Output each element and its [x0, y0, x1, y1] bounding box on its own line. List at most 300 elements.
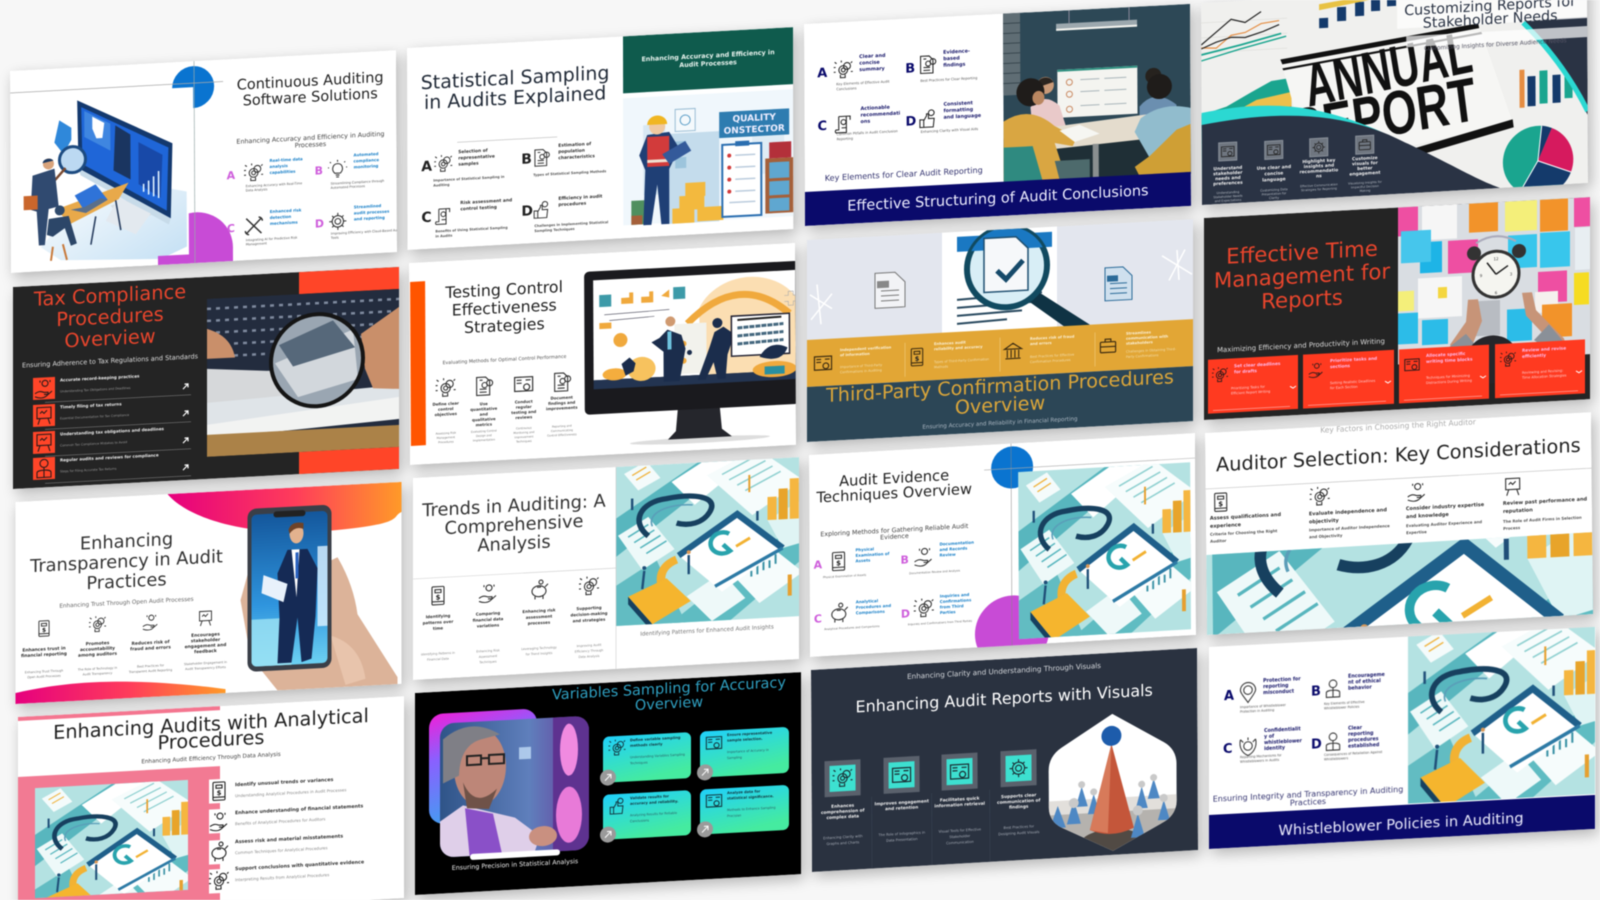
item A: representative — [458, 153, 495, 161]
item 1: Confirmations in Auditing — [840, 368, 882, 374]
photo: sticky notes and clock: 9 — [1480, 273, 1483, 278]
subtitle: Ensuring Adherence to Tax Regulations and Standards — [22, 352, 199, 370]
column 4: Supporting — [576, 605, 602, 611]
subtitle: Evaluating Methods for Optimal Control Performance — [443, 354, 567, 366]
column 3: Monitoring and — [513, 430, 535, 435]
title: Overview — [64, 325, 156, 352]
item D: Streamlined — [354, 203, 381, 209]
column 1: Financial Data — [427, 657, 449, 662]
item A — [1224, 676, 1301, 715]
photo: hand holding phone — [240, 501, 398, 692]
column 4: decision-making — [571, 610, 608, 617]
column 4: feedback — [194, 648, 217, 655]
item B — [521, 140, 606, 178]
card 2: sample selection. — [727, 737, 763, 743]
slide: Whistleblower Policies in Auditing — [1209, 615, 1600, 849]
item C: in Audits — [435, 234, 452, 238]
row 2 — [33, 397, 191, 430]
column 1: Enhancing Trust Through — [25, 669, 63, 675]
column 3 — [1299, 137, 1338, 192]
item A: Physical — [855, 546, 875, 552]
column 2: Use — [480, 401, 488, 406]
slide: Enhancing Audit Reports with Visuals — [811, 648, 1198, 874]
item B: population — [558, 148, 585, 155]
column 3: assessment — [526, 613, 552, 620]
column 3 — [934, 752, 986, 846]
column 4: Supports clear — [1001, 792, 1037, 800]
column 4: better — [1357, 165, 1373, 172]
row 2: Benefits of Analytical Procedures for Auditors — [235, 816, 326, 826]
item B: Documentation Review and Analysis — [909, 568, 961, 575]
column 1: Identifying Patterns in — [421, 651, 455, 657]
column 4: Audit Transparency Efforts — [185, 665, 226, 671]
column 2 — [473, 584, 504, 665]
card 4: Review and revise — [1522, 345, 1566, 354]
column 2: quantitative — [470, 406, 498, 412]
slide: Enhancing Transparency in Audit Practices — [16, 482, 402, 704]
column 2: Evaluate independence and — [1309, 507, 1387, 517]
item C: whistleblower — [1264, 738, 1303, 746]
title: Enhancing — [80, 529, 173, 555]
column 4: engagement and — [185, 642, 226, 650]
column 2: Design and — [476, 433, 492, 438]
item A: Protection for — [1263, 676, 1301, 684]
item C: Reporting — [837, 136, 853, 141]
card 3: Validate results for — [630, 794, 669, 800]
green banner: Enhancing Accuracy and Efficiency in — [641, 48, 775, 63]
illustration: auditors inspecting monitor — [23, 94, 187, 266]
bar chart top — [1319, 0, 1396, 28]
slide: Statistical Sampling in Audits Explained — [407, 27, 793, 250]
item 3: Confirmation Procedures — [1030, 358, 1071, 364]
column 3: ns — [1316, 174, 1322, 179]
item B: Evidence- — [943, 48, 970, 56]
item A: A — [817, 66, 827, 81]
item C: control testing — [460, 204, 497, 212]
isometric illustration — [1403, 615, 1600, 818]
item B: Types of Statistical Sampling Methods — [533, 169, 606, 177]
card 1: Techniques — [629, 760, 648, 765]
item D: D — [905, 114, 917, 130]
column 1: preferences — [1213, 180, 1243, 187]
column 2: Techniques — [478, 659, 497, 664]
column 3 — [511, 376, 537, 444]
item B: Automated — [354, 151, 379, 157]
illustration: quality inspector — [623, 89, 793, 226]
column 3: fraud and errors — [130, 644, 171, 653]
column 2 — [1309, 483, 1390, 539]
item B: compliance — [354, 157, 379, 163]
column 3: for Trend Insights — [526, 651, 553, 656]
item C: C — [227, 222, 235, 235]
column 3: Effective Communication — [1300, 182, 1338, 188]
column 3: processes — [528, 620, 551, 626]
row 4: Steps for Filing Accurate Tax Returns — [60, 467, 117, 474]
column 1: Assess qualifications and — [1210, 512, 1281, 522]
card 4: Reviewing and Revising: — [1522, 369, 1563, 375]
column 4: Process — [1503, 525, 1521, 531]
column 4: Best Practices for — [1004, 824, 1035, 830]
column 4: Efficiency Through — [575, 648, 603, 654]
item C: Procedures and — [856, 603, 891, 610]
item D: audit processes — [354, 209, 390, 215]
item C: Benefits of Using Statistical Sampling — [435, 226, 508, 233]
slide: Customizing Reports for Stakeholder Needs — [1201, 0, 1588, 215]
item D: and language — [943, 113, 982, 121]
column 3: recommendatio — [1300, 167, 1338, 175]
isometric illustration — [1013, 457, 1201, 651]
item A: Protection in Auditing — [1240, 708, 1274, 714]
photo: sticky notes and clock — [1398, 197, 1590, 389]
column 4: Customize — [1352, 155, 1378, 162]
column 2: and Objectivity — [1309, 533, 1343, 539]
card 1: Define variable sampling — [630, 736, 681, 742]
card 3: accuracy and reliability. — [630, 799, 678, 806]
item A: Enhancing Accuracy with Real-Time — [246, 181, 302, 188]
column 4: Stakeholder Engagement in — [184, 660, 227, 666]
column 3: Transparent Audit Reporting — [128, 668, 172, 674]
item A: analysis — [270, 163, 289, 169]
column 4: stakeholder — [191, 637, 221, 644]
row 3: Common Techniques for Analytical Procedures — [235, 845, 328, 855]
card 3: Distractions During Writing — [1426, 379, 1472, 385]
column 3: Techniques — [515, 439, 532, 444]
item A — [421, 147, 505, 188]
item 2: Methods — [934, 365, 948, 369]
item B: Estimation of — [558, 141, 591, 149]
column 1: financial reporting — [21, 651, 67, 659]
title: Tax Compliance — [33, 280, 186, 311]
slide: Third-Party Confirmation Procedures Overview — [807, 214, 1193, 442]
item C: Risk assessment and — [460, 197, 512, 206]
card 2: Ensure representative — [727, 731, 773, 737]
item C: Analytical — [856, 598, 879, 604]
slide: Effective Time Management for Reports — [1204, 197, 1590, 420]
item B: based — [943, 55, 960, 62]
column 4: Encourages — [191, 631, 220, 639]
card 2: Setting Realistic Deadlines — [1330, 379, 1375, 385]
caption: Ensuring Integrity and Transparency in Auditing — [1213, 785, 1403, 804]
row 3: Assess risk and material misstatements — [235, 833, 343, 845]
column 3: Evaluating Auditor Experience and — [1406, 519, 1482, 528]
column 3: Best Practices for — [137, 663, 165, 669]
row 2: Timely filing of tax returns — [60, 401, 122, 410]
column 4: Improving Audit — [577, 643, 602, 648]
item 4 — [1100, 329, 1177, 360]
subtitle: Enhancing Audit Efficiency Through Data Analysis — [141, 752, 281, 765]
item D: Sampling Techniques — [534, 227, 575, 233]
card 2 — [697, 727, 789, 781]
column 1: Criteria for Choosing the Right — [1210, 528, 1278, 537]
column 2: variations — [477, 622, 500, 629]
card 2: Prioritize tasks and — [1330, 356, 1377, 364]
row 2 — [209, 801, 363, 834]
item 3: and errors — [1030, 341, 1053, 346]
column 3: Reduces risk of — [132, 639, 170, 647]
card 2: Sampling — [727, 755, 742, 760]
title: Techniques Overview — [815, 481, 972, 507]
item D — [901, 592, 973, 627]
isometric illustration (zoomed) — [1200, 397, 1600, 807]
column 4: Data Analysis — [578, 654, 600, 659]
item C: Analytical Procedures and Comparisons — [824, 624, 880, 631]
item B: monitoring — [354, 163, 379, 169]
column 4: Making — [1360, 188, 1370, 193]
item C: Integrating AI for Predictive Risk — [246, 236, 298, 242]
slide: Variables Sampling for Accuracy Overview — [415, 672, 801, 895]
item 4: stakeholders — [1126, 340, 1154, 346]
column 1: Enhances — [831, 803, 855, 810]
column 3: Visual Tools for Effective — [939, 827, 981, 834]
item A — [817, 53, 890, 92]
item B: characteristics — [558, 153, 595, 161]
item D: Inquiries and — [940, 592, 970, 599]
kicker: Key Factors in Choosing the Right Auditor — [1320, 417, 1477, 435]
item C: C — [814, 612, 822, 626]
title: Trends in Auditing: A — [421, 491, 607, 522]
row 3: Common Tax Compliance Mistakes to Avoid — [60, 440, 127, 448]
slide: Auditor Selection: Key Considerations — [1200, 397, 1600, 807]
card 1: Set clear deadlines — [1234, 361, 1281, 369]
slide: Tax Compliance Procedures Overview — [13, 267, 399, 489]
column 1: Understanding — [1217, 190, 1239, 195]
column 3: Enhancing risk — [522, 607, 556, 614]
column 1: Define clear — [433, 400, 459, 407]
card 4 — [697, 785, 789, 838]
row 1: Identify unusual trends or variances — [235, 777, 333, 788]
item A: Key Elements of Effective Audit — [836, 80, 890, 86]
annual report block — [1280, 24, 1514, 154]
caption: Practices — [1290, 797, 1326, 808]
footer banner — [1209, 795, 1595, 849]
row 3 — [33, 424, 191, 457]
item D: Clear — [1348, 725, 1363, 732]
item B: B — [521, 151, 532, 168]
slide: Continuous Auditing Software Solutions — [10, 50, 402, 273]
column 2: Implementation — [473, 437, 495, 443]
item A: Physical Examination of Assets — [823, 573, 867, 579]
item C — [817, 104, 901, 142]
annual report block: REPORT — [1287, 65, 1480, 167]
column 4 — [546, 372, 578, 438]
row 3 — [209, 833, 343, 865]
item D — [521, 193, 608, 234]
card 1 — [1208, 355, 1298, 414]
item C: Confidentialit — [1264, 726, 1301, 734]
item A: samples — [458, 161, 479, 168]
column 2: financial data — [473, 616, 504, 623]
item D — [905, 100, 982, 135]
item A: summary — [859, 66, 886, 73]
title: in Audits Explained — [424, 82, 606, 114]
item D — [315, 204, 398, 240]
card 3 — [600, 790, 691, 843]
column 3: Continuous — [516, 426, 532, 430]
item A: Auditing — [433, 183, 450, 188]
item 3: Reduces risk of fraud — [1030, 335, 1075, 341]
column 1: Assessing Risk — [436, 431, 456, 436]
item B — [314, 151, 384, 191]
item C: recommendati — [860, 111, 901, 119]
title: Practices — [86, 569, 167, 594]
title: Effectiveness — [452, 295, 557, 320]
item C: y of — [1264, 734, 1275, 740]
item B — [905, 48, 977, 84]
column 3: information retrieval — [934, 801, 986, 810]
column 1: objectives — [435, 411, 458, 417]
item D: procedures — [1348, 736, 1379, 744]
column 1: complex data — [826, 813, 859, 821]
pie chart — [1502, 125, 1574, 188]
title: Enhancing Audit Reports with Visuals — [855, 681, 1153, 716]
dark curved panels — [1201, 17, 1588, 205]
card 3 — [1399, 345, 1489, 403]
item B: Best Practices for Clear Reporting — [920, 76, 977, 83]
title: Effective Time — [1226, 237, 1378, 270]
column 2: Assessment — [479, 654, 498, 659]
card 3: Allocate specific — [1426, 351, 1466, 359]
title: Procedures — [158, 726, 264, 754]
item A: Conclusions — [836, 86, 857, 91]
column 1 — [821, 759, 865, 846]
title: Transparency in Audit — [29, 546, 223, 577]
row 4 — [33, 450, 191, 484]
item D: procedures — [558, 201, 587, 208]
area chart — [1201, 78, 1292, 128]
card 3: writing time blocks — [1426, 356, 1473, 365]
title: Auditor Selection: Key Considerations — [1216, 434, 1581, 476]
item D: Whistleblowers — [1324, 756, 1349, 762]
item 2: Types of Third-Party Confirmation — [933, 357, 989, 364]
photo: meeting room — [1003, 4, 1191, 184]
column 1: Auditor — [1210, 538, 1227, 544]
column 1: Identifying — [426, 613, 450, 619]
column 2 — [874, 755, 929, 843]
isometric illustration — [611, 446, 808, 634]
title box: Stakeholder Needs — [1423, 8, 1558, 32]
column 2: Clarity — [1269, 196, 1279, 200]
item A: Data Analysis — [246, 187, 268, 193]
card 2 — [1303, 350, 1394, 409]
title: Third-Party Confirmation Procedures — [825, 365, 1174, 407]
column 4: Control Effectiveness — [547, 432, 577, 438]
column 1 — [1213, 142, 1244, 203]
column 2: Promotes — [86, 640, 110, 647]
row 3: Understanding tax obligations and deadlines — [60, 426, 164, 437]
item A: A — [421, 159, 432, 175]
item 4: Streamlines — [1126, 330, 1152, 336]
card 4 — [1495, 339, 1585, 398]
item B: Documentation — [939, 540, 974, 547]
card 4: Time Allocation Strategies — [1521, 373, 1567, 380]
subtitle: Maximizing Efficiency and Productivity in Writing — [1217, 337, 1385, 354]
green banner: Audit Processes — [679, 58, 737, 69]
column 4: Reporting and — [552, 424, 572, 429]
item A: capabilities — [270, 169, 296, 175]
item D: D — [1311, 737, 1322, 753]
item C: detection — [270, 214, 291, 220]
column 2: Use clear and — [1257, 164, 1291, 172]
item A: Importance of Whistleblower — [1240, 703, 1287, 709]
title: Comprehensive — [445, 511, 583, 539]
item B: Encourageme — [1348, 672, 1386, 680]
item C: C — [817, 119, 827, 134]
column 1: time — [433, 625, 443, 631]
item A: Importance of Statistical Sampling in — [433, 175, 505, 183]
column 3 — [128, 614, 172, 674]
column 2 — [77, 615, 117, 677]
column 4: Visualizing Insights for — [1348, 180, 1383, 186]
column 3: Stakeholder — [949, 834, 971, 839]
title box — [1397, 0, 1587, 48]
column 3: Expertise — [1406, 529, 1427, 535]
column 2: and — [480, 411, 488, 417]
item B: B — [1311, 684, 1321, 700]
item B: B — [901, 553, 909, 567]
column 2: Presentation for — [1262, 191, 1287, 197]
column 3: Communication — [946, 840, 974, 845]
column 2: concise — [1264, 170, 1283, 177]
row 4: Regular audits and reviews for compliance — [60, 452, 159, 463]
column 1: Enhances trust in — [22, 645, 66, 654]
column 2: and retention — [885, 804, 918, 812]
item D: formatting — [943, 107, 974, 114]
item D: Consequences of Retaliation Against — [1324, 750, 1383, 757]
item C: ons — [860, 119, 870, 125]
title: Procedures — [56, 303, 164, 331]
slide: Enhancing Audits with Analytical Procedures — [18, 696, 404, 900]
item B — [900, 540, 974, 576]
column 1: comprehension of — [821, 807, 865, 816]
item D: Confirmations — [940, 597, 972, 604]
column 1: Management — [437, 435, 456, 440]
footer banner — [805, 172, 1191, 226]
photo: magnifying glass over documents — [207, 289, 399, 457]
caption: Key Elements for Clear Audit Reporting — [825, 165, 983, 183]
item C — [227, 207, 302, 248]
column 4: Designing Audit Visuals — [998, 830, 1040, 836]
column 2: objectivity — [1309, 518, 1340, 525]
item D: reporting — [1348, 730, 1374, 738]
card 2: Importance of Accuracy in — [727, 748, 769, 754]
column 2: The Role of Infographics in — [878, 831, 925, 837]
card 1: for drafts — [1234, 368, 1257, 375]
row 2: Enhance understanding of financial statements — [235, 803, 363, 816]
column 2 — [470, 376, 498, 443]
column 4: findings and — [548, 400, 576, 406]
card 3: Conclusions — [630, 818, 649, 823]
item B: B — [905, 61, 915, 77]
column 4: Document — [551, 395, 573, 401]
subtitle: Enhancing Trust Through Open Audit Processes — [59, 597, 194, 610]
item B — [1311, 672, 1386, 711]
title: Management for — [1214, 259, 1390, 294]
item 1: Importance of Third-Party — [840, 363, 882, 369]
subtitle: Exploring Methods for Gathering Reliable Audit — [820, 523, 969, 538]
item D: D — [901, 607, 910, 621]
item 4: Party Confirmations — [1126, 353, 1159, 359]
green banner — [623, 27, 793, 93]
row 4: Support conclusions with quantitative evidence — [235, 859, 365, 872]
subtitle: Enhancing Accuracy and Efficiency in Auditing — [236, 130, 384, 146]
card 4: statistical significance. — [727, 794, 774, 801]
column 4: reputation — [1503, 507, 1533, 515]
column 4 — [1503, 474, 1588, 531]
row 1: Understanding Tax Obligations and Deadlines — [60, 386, 131, 394]
title: Strategies — [464, 314, 545, 337]
subtitle: Customizing Insights for Diverse Audience Needs — [1424, 38, 1567, 52]
item 1: of information — [840, 352, 870, 357]
